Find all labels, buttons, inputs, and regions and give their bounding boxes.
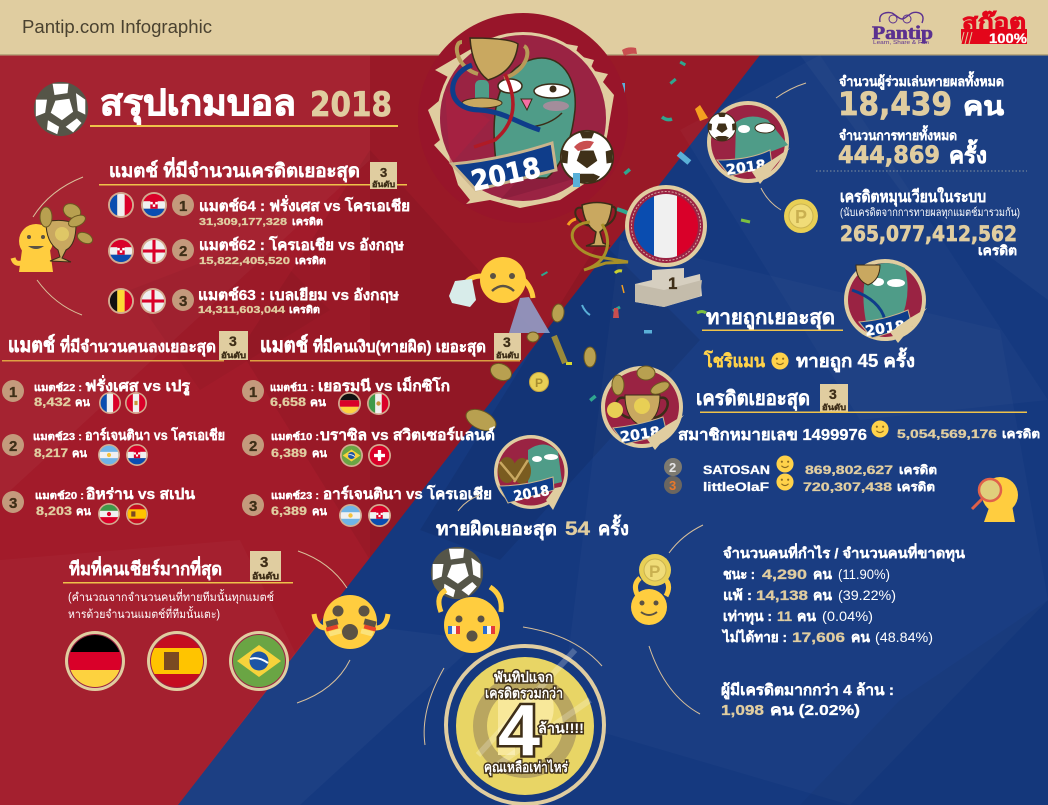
blue background panel — [178, 55, 1048, 805]
row 1: ฟรั่งเศส vs เปรู — [85, 375, 191, 396]
row 1: 6,658 — [270, 395, 306, 409]
panel: most credits: 720,307,438 — [803, 480, 892, 494]
panel: profit and loss: คน — [813, 566, 832, 582]
icon: P coin — [784, 199, 818, 233]
panel: profit and loss: คน — [851, 629, 870, 645]
panel: most correct guesses: ทายถูกเยอะสุด — [706, 307, 835, 331]
row 3: คน — [312, 506, 327, 518]
row 2: บราซิล vs สวิตเซอร์แลนด์ — [320, 426, 495, 444]
main title with ball — [34, 82, 398, 136]
panel: credits in circulation: เครดิตหมุนเวียนในระบบ — [840, 187, 986, 207]
panel: profit and loss: เท่าทุน : — [723, 608, 772, 625]
panel: matches with most wrong guesses — [242, 333, 521, 527]
panel: credits in circulation — [816, 171, 1027, 258]
panel: credits in circulation: (นับเครดิตจากการทายผลทุกแมตช์มารวมกัน) — [840, 206, 1020, 219]
badge: top 3: 3 — [503, 334, 511, 350]
icon: smiley — [771, 352, 789, 370]
panel: over 4 million credits: ผู้มีเครดิตมากกว่า 4 ล้าน : — [721, 681, 894, 700]
row 1 — [2, 375, 191, 414]
badge: top 3 — [370, 162, 397, 189]
logo: สก๊อต 100%: 100% — [989, 30, 1028, 46]
panel: credits in circulation: 265,077,412,562 — [840, 222, 1017, 246]
panel: profit and loss: คน — [797, 608, 816, 624]
row 3: แมตช์20 : — [35, 490, 84, 502]
panel: profit and loss: (39.22%) — [838, 587, 896, 603]
panel: total participants: จำนวนผู้ร่วมเล่นทายผลทั้งหมด — [839, 71, 1004, 90]
logo: Pantip: Learn, Share & Fun — [873, 40, 929, 46]
row 1: 8,432 — [34, 395, 71, 409]
big coin: 4 million callout: คุณเหลือเท่าไหร่ — [484, 758, 568, 776]
row 3: แมตช์63 : เบลเยียม vs อังกฤษ — [198, 286, 399, 304]
badge: top 3 — [219, 331, 248, 360]
mascot with soccer ball — [431, 547, 501, 653]
big coin: 4 million callout: พันทิปแจก — [494, 669, 553, 685]
sad mascot with empty bags — [449, 257, 550, 333]
panel: over 4 million credits — [721, 681, 894, 719]
row 2: คน — [312, 448, 327, 460]
row 1 — [242, 376, 450, 415]
confetti — [541, 47, 750, 402]
year banner: 2018 — [468, 151, 544, 198]
panel: profit and loss: ชนะ : — [723, 566, 755, 582]
cheering mascot — [314, 595, 388, 649]
sticker: angry mascot with ball: 2018 — [725, 157, 767, 179]
row 2 — [242, 426, 495, 467]
row 1: 31,309,177,328 — [199, 216, 287, 228]
panel: matches with most players — [2, 331, 248, 525]
big coin: 4 million callout: ล้าน!!!! — [538, 720, 584, 736]
badge: top 3: 3 — [229, 333, 237, 349]
sticker: wrong guess mascot — [458, 435, 568, 511]
panel: over 4 million credits: คน (2.02%) — [770, 702, 860, 719]
main title with ball: 2018 — [310, 85, 392, 125]
row 2: 8,217 — [34, 446, 68, 460]
panel: total participants: 18,439 — [838, 85, 952, 123]
logo: Pantip: Pantip — [872, 23, 933, 44]
row 2: 2 — [9, 438, 17, 455]
panel: matches with most players: แมตช์ — [8, 334, 55, 357]
row 1: เยอรมนี vs เม็กซิโก — [318, 376, 450, 395]
panel: profit and loss: 14,138 — [756, 587, 808, 603]
panel: total participants: จำนวนการทายทั้งหมด — [839, 125, 957, 143]
big coin: 4 million callout: 4 — [498, 691, 540, 771]
panel: total participants: คน — [963, 91, 1004, 121]
panel: profit and loss: (11.90%) — [838, 566, 890, 582]
row 1: คน — [75, 397, 90, 409]
soccer ball — [560, 130, 614, 184]
panel: matches with most wrong guesses: แมตช์ — [260, 334, 308, 357]
badge: top 3: อันดับ — [221, 351, 246, 360]
row 1: 1 — [9, 384, 17, 401]
row 3: อิหร่าน vs สเปน — [86, 485, 196, 503]
badge: top 3: 3 — [380, 165, 387, 180]
panel: most credits: 2 — [669, 460, 676, 475]
row 3: 3 — [179, 293, 187, 310]
panel: profit and loss: ไม่ได้ทาย : — [721, 628, 787, 645]
row 3: 8,203 — [36, 504, 72, 518]
panel: most cheered teams: ทีมที่คนเชียร์มากที่สุด — [69, 556, 222, 581]
panel: most correct guesses: โชริแมน — [703, 350, 766, 371]
main title with ball: สรุปเกมบอล — [100, 82, 296, 126]
panel: matches with most credits: แมตช์ ที่มีจำนวนเครดิตเยอะสุด — [109, 157, 360, 183]
text: most wrong guesses: 54 — [565, 519, 591, 540]
panel: credits in circulation: เครดิต — [978, 243, 1017, 258]
main sticker: mascot with trophy 2018 — [418, 13, 628, 223]
France winner flag on podium: 1 — [668, 274, 677, 293]
row 1: แมตช์11 : — [270, 382, 314, 394]
panel: total participants: ครั้ง — [949, 139, 987, 168]
logo: สก๊อต 100%: สก๊อต — [962, 10, 1026, 34]
sticker: trophy with coins — [601, 366, 684, 450]
row 3: คน — [76, 506, 91, 518]
falling coins — [463, 303, 596, 435]
panel: most credits: เครดิต — [1002, 427, 1040, 441]
row 2: แมตช์62 : โครเอเชีย vs อังกฤษ — [199, 235, 404, 254]
text: most wrong guesses: ครั้ง — [598, 514, 629, 540]
panel: most credits: เครดิต — [899, 463, 937, 477]
panel: over 4 million credits: 1,098 — [721, 702, 764, 719]
sticker: wrong guess mascot: 2018 — [512, 483, 551, 505]
row 1: แมตช์22 : — [34, 382, 82, 394]
panel: most cheered teams: (คำนวณจากจำนวนคนที่ทายทีมนั้นทุกแมตช์ — [68, 589, 274, 604]
badge: top 3: อันดับ — [252, 571, 279, 581]
sticker: angry mascot with ball — [707, 83, 806, 210]
row 2: 6,389 — [271, 446, 307, 460]
badge: top 3: 3 — [260, 554, 268, 571]
row 1: คน — [310, 397, 327, 409]
mascot holding coin — [631, 525, 703, 714]
row 2 — [2, 426, 225, 466]
panel: profit and loss: แพ้ : — [723, 587, 752, 603]
row 3 — [108, 286, 399, 316]
row 2: 15,822,405,520 — [199, 255, 290, 267]
badge: top 3: อันดับ — [372, 180, 395, 189]
row 3: 3 — [249, 498, 257, 515]
panel: most credits: 869,802,627 — [805, 463, 893, 477]
panel: profit and loss: คน — [813, 587, 832, 603]
panel: most credits: เครดิต — [897, 480, 935, 494]
badge: top 3 — [494, 333, 521, 360]
row 2: อาร์เจนตินา vs โครเอเชีย — [85, 426, 225, 443]
row 1 — [108, 192, 410, 228]
panel: most credits: 3 — [669, 478, 676, 493]
text: most wrong guesses — [436, 514, 629, 541]
row 3: 6,389 — [271, 504, 307, 518]
panel: profit and loss: 4,290 — [762, 566, 807, 582]
text: most wrong guesses: ทายผิดเยอะสุด — [436, 519, 557, 541]
logo: สก๊อต 100% — [961, 10, 1028, 46]
panel: most credits: 5,054,569,176 — [897, 427, 997, 441]
row 2: 2 — [249, 438, 257, 455]
panel: most cheered teams — [63, 551, 388, 703]
row 3: อาร์เจนตินา vs โครเอเชีย — [323, 484, 492, 503]
header title: Pantip.com Infographic — [22, 17, 212, 37]
icon: P coin: P — [795, 207, 807, 227]
falling coins: P — [535, 376, 543, 390]
row 2: เครดิต — [295, 255, 326, 267]
panel: total participants — [838, 71, 1004, 169]
header bar — [0, 0, 1048, 56]
row 1: 1 — [249, 384, 257, 401]
logo: Pantip — [872, 12, 933, 46]
icon: soccer ball — [34, 82, 88, 136]
panel: matches with most players: ที่มีจำนวนคนลงเยอะสุด — [60, 335, 216, 357]
sticker: trophy with coins: 2018 — [619, 424, 661, 446]
panel: most credits: สมาชิกหมายเลข 1499976 — [678, 426, 867, 444]
panel: profit and loss: จำนวนคนที่กำไร / จำนวนคนที่ขาดทุน — [723, 543, 965, 562]
France winner flag on podium — [625, 185, 707, 307]
mascot holding coin: P — [649, 562, 660, 581]
panel: total participants: 444,869 — [838, 141, 940, 169]
trophy — [457, 38, 527, 108]
big coin: 4 million callout: เครดิตรวมกว่า — [485, 685, 563, 701]
panel: profit and loss: 17,606 — [792, 629, 845, 645]
sticker: trophy mascot — [844, 259, 927, 343]
panel: most credits: SATOSAN — [703, 463, 770, 477]
panel: most credits: littleOlaF — [703, 480, 769, 494]
panel: matches with most wrong guesses: ที่มีคนเงิบ(ทายผิด) เยอะสุด — [313, 335, 486, 357]
row 3: 14,311,603,044 — [198, 304, 285, 316]
row 1: แมตช์64 : ฟรั่งเศส vs โครเอเชีย — [199, 195, 410, 215]
panel: profit and loss: 11 — [777, 608, 792, 624]
badge: top 3: อันดับ — [496, 351, 519, 360]
flags — [65, 631, 289, 691]
panel: most credits — [664, 384, 1040, 494]
row 2 — [108, 235, 404, 267]
row 1: 1 — [179, 198, 187, 215]
panel: most correct guesses — [702, 307, 915, 373]
panel: profit and loss: (0.04%) — [822, 608, 873, 624]
row 3: แมตช์23 : — [271, 490, 319, 502]
panel: most correct guesses: ทายถูก 45 ครั้ง — [796, 347, 915, 373]
row 2: แมตช์23 : — [33, 431, 82, 443]
row 1: เครดิต — [292, 216, 323, 228]
panel: profit and loss: (48.84%) — [875, 629, 933, 645]
badge: top 3: 3 — [829, 386, 837, 402]
badge: top 3 — [250, 551, 281, 581]
small trophy with ribbon — [572, 202, 628, 270]
panel: profit and loss — [721, 543, 965, 645]
panel: most cheered teams: หารด้วยจำนวนแมตช์ที่ทีมนั้นเตะ) — [68, 606, 220, 621]
row 3: เครดิต — [289, 304, 320, 316]
mascot with trophy — [13, 201, 94, 272]
badge: top 3: อันดับ — [822, 403, 846, 412]
row 3 — [2, 485, 196, 525]
panel: matches with most credits — [13, 157, 410, 316]
row 3: 3 — [9, 495, 17, 512]
row 2: 2 — [179, 243, 187, 260]
badge: top 3 — [820, 384, 848, 412]
row 2: คน — [72, 448, 87, 460]
sticker: trophy mascot: 2018 — [864, 318, 906, 340]
big coin: 4 million callout — [424, 627, 604, 804]
row 3 — [242, 484, 492, 527]
mascot with magnifier — [972, 477, 1018, 522]
row 2: แมตช์10 : — [271, 431, 319, 443]
panel: most credits: เครดิตเยอะสุด — [696, 388, 810, 411]
